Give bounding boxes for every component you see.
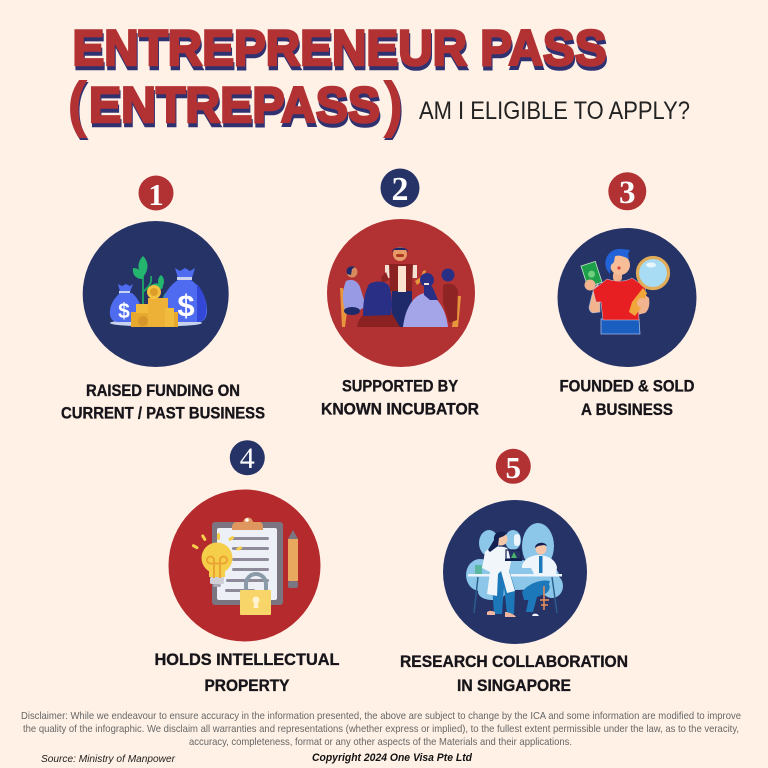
icon circle 1: money bags, coins and plant: [83, 221, 229, 367]
label 5: IN SINGAPORE: [457, 677, 571, 695]
number badge 3: 3: [619, 175, 636, 211]
title: Entrepreneur Pass (EntrePass): ): [383, 70, 404, 139]
copyright: Copyright 2024 One Visa Pte Ltd: [312, 752, 472, 764]
icon circle 3: man with money and magnifier: [558, 228, 696, 367]
icon circle 2: group meeting: [327, 219, 475, 367]
label 1: RAISED FUNDING ON: [86, 382, 240, 400]
title: Entrepreneur Pass (EntrePass): (: [67, 70, 88, 139]
label 5: RESEARCH COLLABORATION: [400, 653, 628, 671]
title: Entrepreneur Pass (EntrePass): ENTREPRENEUR PASS: [74, 24, 608, 80]
icon circle 4: clipboard, bulb, lock and pencil: [168, 490, 320, 642]
number badge 5: 5: [506, 450, 521, 485]
label 4: PROPERTY: [204, 677, 290, 695]
icon circle 5: researchers in lab: [443, 500, 587, 644]
number badge 2: 2: [392, 171, 408, 208]
disclaimer: [21, 711, 741, 748]
label 3: [560, 378, 695, 419]
source: Source: Ministry of Manpower: [41, 754, 176, 765]
number badge 1: [138, 176, 174, 212]
label 5: [400, 653, 628, 695]
number badge 1: 1: [148, 177, 164, 212]
number badge 5: [496, 449, 531, 485]
disclaimer: accuracy, completeness, format or any other aspects of the Materials and their applications.: [189, 737, 572, 748]
number badge 2: [380, 168, 420, 208]
label 2: SUPPORTED BY: [342, 378, 458, 396]
icon circle 1: money bags, coins and plant: $: [177, 288, 195, 323]
title: Entrepreneur Pass (EntrePass): (: [68, 72, 89, 141]
label 2: [321, 378, 479, 418]
label 1: CURRENT / PAST BUSINESS: [61, 404, 265, 422]
label 2: KNOWN INCUBATOR: [321, 400, 479, 418]
label 3: FOUNDED & SOLD: [560, 378, 695, 396]
number badge 4: 4: [240, 442, 255, 475]
title: Entrepreneur Pass (EntrePass): ENTREPASS: [89, 77, 380, 133]
label 3: A BUSINESS: [581, 401, 673, 419]
number badge 3: [608, 172, 646, 211]
label 1: [61, 382, 265, 422]
title: Entrepreneur Pass (EntrePass): ): [384, 72, 405, 141]
icon circle 1: money bags, coins and plant: $: [118, 300, 130, 323]
label 4: HOLDS INTELLECTUAL: [154, 651, 340, 669]
title: Entrepreneur Pass (EntrePass): ENTREPRENEUR PASS: [72, 20, 606, 76]
number badge 4: [230, 440, 265, 475]
title: Entrepreneur Pass (EntrePass): ENTREPASS: [90, 81, 381, 137]
subtitle: AM I ELIGIBLE TO APPLY?: [419, 97, 690, 125]
label 4: [154, 651, 340, 695]
title: Entrepreneur Pass (EntrePass): [67, 20, 608, 141]
